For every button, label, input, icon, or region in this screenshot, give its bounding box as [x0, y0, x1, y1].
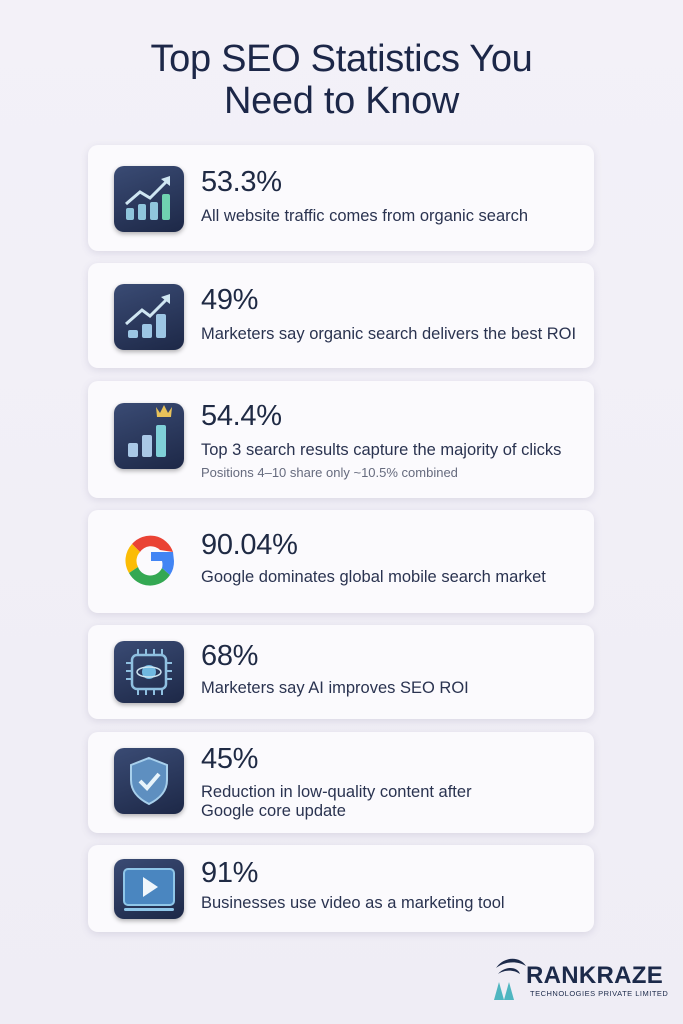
title: Need to Know — [224, 80, 459, 122]
icon: bar chart with crown — [114, 403, 184, 469]
card 1 — [88, 145, 594, 251]
stat: 49% — [201, 284, 258, 316]
icon: shield check — [114, 748, 184, 814]
stat: 53.3% — [201, 166, 282, 198]
description: Top 3 search results capture the majority of clicks — [201, 441, 561, 459]
card 2 — [88, 263, 594, 368]
description: All website traffic comes from organic search — [201, 207, 528, 225]
description: Businesses use video as a marketing tool — [201, 894, 505, 912]
card 5 — [88, 625, 594, 719]
stat: 68% — [201, 640, 258, 672]
stat: 54.4% — [201, 400, 282, 432]
note: Positions 4–10 share only ~10.5% combined — [201, 465, 458, 480]
logo: Rankraze: RANKRAZE — [526, 962, 663, 989]
icon: growth chart — [114, 166, 184, 232]
description: Marketers say AI improves SEO ROI — [201, 679, 469, 697]
title: Top SEO Statistics You — [150, 38, 533, 80]
description: Reduction in low-quality content after — [201, 783, 472, 801]
stat: 91% — [201, 857, 258, 889]
icon: video player — [114, 859, 184, 919]
stat: 45% — [201, 743, 258, 775]
logo: Rankraze — [494, 958, 668, 1000]
description: Marketers say organic search delivers the best ROI — [201, 325, 576, 343]
description: Google dominates global mobile search market — [201, 568, 546, 586]
stat: 90.04% — [201, 529, 298, 561]
description: Google core update — [201, 802, 346, 820]
card 7 — [88, 845, 594, 932]
icon: AI chip — [114, 641, 184, 703]
card 3 — [88, 381, 594, 498]
card 6 — [88, 732, 594, 833]
icon: growth chart — [114, 284, 184, 350]
icon: google G — [125, 536, 174, 586]
title — [150, 38, 533, 122]
description — [201, 783, 472, 820]
card 4 — [88, 510, 594, 613]
logo: Rankraze: TECHNOLOGIES PRIVATE LIMITED — [530, 989, 668, 998]
